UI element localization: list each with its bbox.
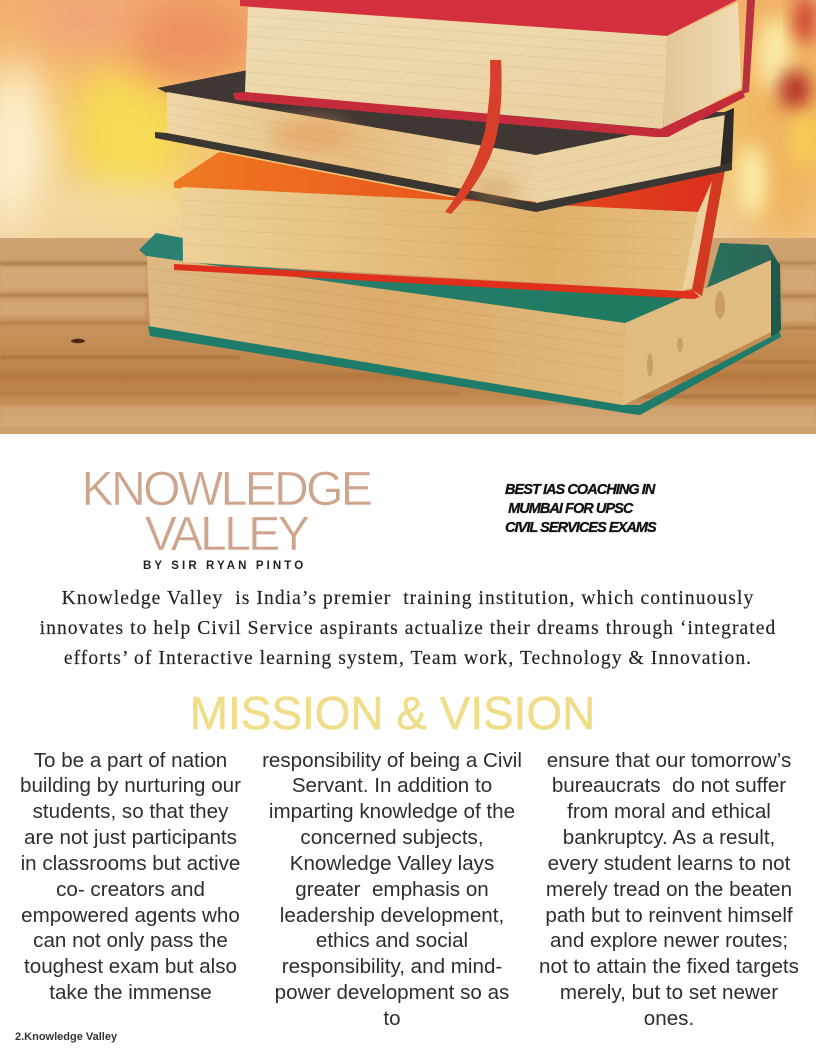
text column 2 [262, 748, 522, 1030]
text column 2: responsibility of being a Civil [262, 748, 522, 772]
text column 3: path but to reinvent himself [545, 904, 793, 927]
text column 2: power development so as [275, 981, 509, 1004]
text column 1: toughest exam but also [24, 955, 237, 978]
text column 1: building by nurturing our [20, 774, 241, 797]
text column 1: co- creators and [56, 878, 205, 901]
photo: stack of books on wooden table [0, 0, 816, 434]
text column 2: concerned subjects, [300, 826, 484, 849]
text column 2: ethics and social [316, 929, 468, 952]
title: Knowledge Valley: KNOWLEDGE [82, 463, 370, 516]
ribbon bookmark [445, 60, 502, 214]
text column 1: in classrooms but active [21, 852, 240, 875]
byline: BY SIR RYAN PINTO [143, 560, 306, 572]
text column 1: take the immense [49, 981, 212, 1004]
text column 2: to [383, 1007, 401, 1030]
text column 3: ensure that our tomorrow’s [547, 748, 791, 772]
text column 2: imparting knowledge of the [269, 800, 515, 823]
text column 3: bureaucrats do not suffer [552, 774, 786, 797]
text column 2: Knowledge Valley lays [290, 852, 494, 875]
tagline: best IAS coaching: CIVIL SERVICES EXAMS [505, 520, 656, 536]
heading: mission and vision: MISSION & VISION [190, 687, 595, 739]
tagline: best IAS coaching: MUMBAI FOR UPSC [508, 501, 632, 517]
text column 3: merely, but to set newer [560, 981, 778, 1004]
intro paragraph: Knowledge Valley is India’s premier training institution, which continuously [62, 588, 754, 609]
text column 3: not to attain the fixed targets [539, 955, 799, 978]
text column 1: are not just participants [24, 826, 237, 849]
text column 3: every student learns to not [548, 852, 790, 875]
book: orange-red [174, 152, 725, 299]
tagline: best IAS coaching [505, 482, 657, 536]
text column 1: empowered agents who [21, 904, 240, 927]
text column 3: ones. [644, 1007, 694, 1030]
text column 1: can not only pass the [33, 929, 228, 952]
intro paragraph: innovates to help Civil Service aspirants actualize their dreams through ‘integrated [40, 618, 776, 639]
text column 2: leadership development, [280, 904, 504, 927]
text column 1: To be a part of nation [34, 748, 227, 772]
text column 2: Servant. In addition to [292, 774, 492, 797]
text column 1 [20, 748, 241, 1004]
text column 3: and explore newer routes; [550, 929, 788, 952]
text column 3: merely tread on the beaten [546, 878, 792, 901]
text column 3: from moral and ethical [567, 800, 771, 823]
text column 2: responsibility, and mind- [282, 955, 502, 978]
wooden table [0, 238, 816, 435]
text column 1: students, so that they [33, 800, 228, 823]
book: red (top) [233, 0, 755, 137]
bokeh background [0, 0, 816, 250]
text column 3: bankruptcy. As a result, [563, 826, 775, 849]
text column 3 [539, 748, 799, 1030]
book: green (bottom) [139, 233, 781, 415]
title: Knowledge Valley [82, 463, 371, 560]
intro paragraph: efforts’ of Interactive learning system, Team work, Technology & Innovation. [64, 648, 752, 669]
tagline: best IAS coaching: BEST IAS COACHING IN [505, 482, 654, 498]
text column 2: greater emphasis on [295, 878, 489, 901]
book: dark [155, 70, 734, 212]
intro paragraph [40, 588, 776, 669]
title: Knowledge Valley: VALLEY [145, 508, 307, 560]
footer label: 2.Knowledge Valley [15, 1031, 117, 1043]
